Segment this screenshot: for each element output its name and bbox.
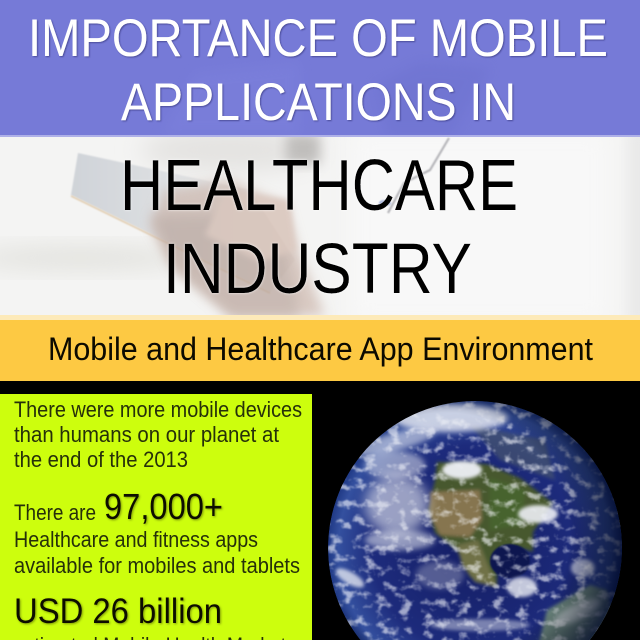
panel: lime statistics (0, 394, 312, 640)
text: 97,000+ healthcare apps statistic (14, 486, 300, 578)
earth: major cloud systems (333, 404, 605, 631)
heading: healthcare industry: INDUSTRY (163, 230, 472, 309)
section heading: Mobile and Healthcare App Environment (48, 331, 593, 367)
earth: limb shading (328, 401, 622, 640)
earth: gulf of mexico (490, 544, 530, 578)
text: mobile devices statistic: There were more mobile devices (14, 397, 302, 422)
text: 97,000+ healthcare apps statistic: 97,000+ (104, 486, 223, 527)
text: USD 26 billion statistic (14, 592, 287, 640)
heading: healthcare industry (120, 146, 518, 309)
text: mobile devices statistic: the end of the 2013 (14, 447, 188, 472)
image: planet earth (328, 400, 623, 640)
heading: importance of mobile applications in (28, 9, 608, 132)
earth: land masses (428, 425, 615, 640)
text: 97,000+ healthcare apps statistic: There are (14, 500, 96, 525)
panel: purple title band (0, 0, 640, 137)
earth: cloud texture (328, 400, 623, 640)
panel: blurred doctor with tablet photo (0, 128, 640, 325)
text: mobile devices statistic: than humans on our planet at (14, 422, 280, 447)
heading: healthcare industry: HEALTHCARE (120, 146, 518, 226)
text: 97,000+ healthcare apps statistic: Healthcare and fitness apps (14, 527, 258, 552)
text: mobile devices statistic (14, 397, 302, 472)
panel: yellow section heading band (0, 315, 640, 381)
text: USD 26 billion statistic: USD 26 billion (14, 592, 222, 631)
text: 97,000+ healthcare apps statistic: available for mobiles and tablets (14, 553, 300, 578)
heading: importance of mobile applications in: APPLICATIONS IN (121, 73, 516, 132)
